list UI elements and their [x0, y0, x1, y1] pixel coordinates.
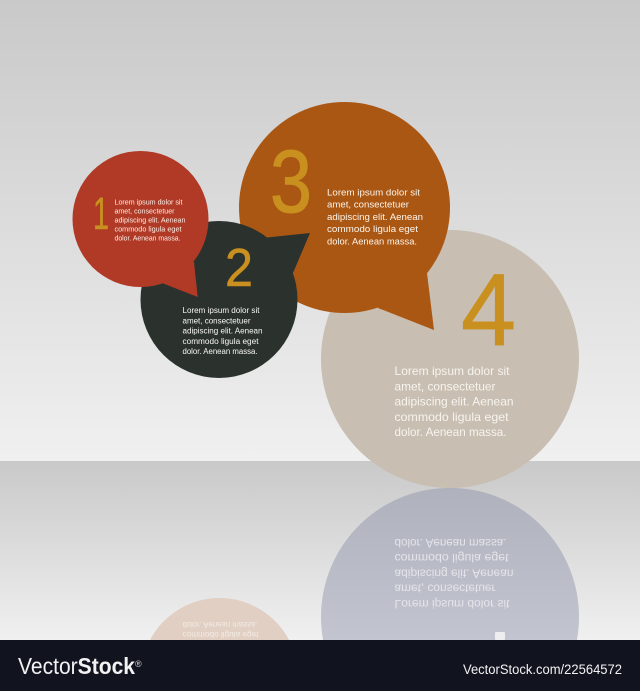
bubble 4 text: amet, consectetuer: [394, 379, 496, 393]
bubble 4 text: dolor. Aenean massa.: [394, 425, 506, 439]
bubble 4: [321, 230, 579, 488]
bubble 1 text: Lorem ipsum dolor sit: [114, 200, 183, 206]
reflection of bubble 2: [150, 598, 289, 640]
footer logo: VectorStock: [18, 653, 135, 679]
reflection of bubble 4: amet, consectetuer: [394, 582, 496, 596]
reflection of bubble 4: [321, 488, 579, 640]
reflective floor: [0, 461, 640, 640]
footer bar: [0, 640, 640, 691]
bubble 1 text: amet, consectetuer: [114, 208, 175, 216]
bubble 2 text: [182, 306, 262, 356]
reflected digit stem: [495, 632, 505, 640]
reflection of bubble 4: commodo ligula eget: [394, 551, 509, 565]
bubble 2 text: amet, consectetuer: [182, 316, 251, 325]
bubble 1 text: commodo ligula eget: [114, 226, 182, 234]
bubble 2 text: commodo ligula eget: [182, 337, 259, 346]
bubble 3: [239, 102, 450, 330]
bubble 3 text: dolor. Aenean massa.: [327, 236, 417, 247]
floor reflections: [150, 488, 579, 640]
bubble 1 text: [114, 200, 186, 242]
reflection of bubble 2: commodo ligula eget: [182, 630, 259, 639]
bubble 4 text: Lorem ipsum dolor sit: [394, 364, 510, 378]
bubble 3 text: commodo ligula eget: [327, 224, 418, 235]
bubble 3 text: [327, 188, 423, 247]
footer URL: VectorStock.com/22564572: [463, 662, 622, 677]
number 1: 1: [93, 188, 109, 239]
background wall: [0, 0, 640, 461]
reflection of bubble 4: Lorem ipsum dolor sit: [394, 597, 510, 611]
bubble 2: [140, 221, 310, 378]
reflection of bubble 2: dolor. Aenean massa.: [182, 620, 258, 629]
number 2: 2: [225, 238, 253, 298]
bubble 3 text: amet, consectetuer: [327, 200, 409, 211]
bubble 1 text: adipiscing elit. Aenean: [114, 218, 186, 224]
number 3: 3: [270, 131, 312, 231]
bubble 4 text: adipiscing elit. Aenean: [394, 395, 514, 409]
bubble 4 text: commodo ligula eget: [394, 410, 509, 424]
bubble 1: [72, 151, 208, 297]
bubble 3 text: Lorem ipsum dolor sit: [327, 188, 420, 198]
bubble 1 text: dolor. Aenean massa.: [114, 236, 181, 242]
bubble 4 text: [394, 364, 514, 439]
bubble 2 text: Lorem ipsum dolor sit: [182, 306, 260, 315]
reflection of bubble 4: adipiscing elit. Aenean: [394, 566, 514, 580]
registered mark: ®: [135, 659, 142, 669]
bubble 2 text: dolor. Aenean massa.: [182, 347, 258, 356]
number 4: 4: [461, 253, 516, 367]
reflection of bubble 4: dolor. Aenean massa.: [394, 536, 506, 550]
bubble 3 text: adipiscing elit. Aenean: [327, 212, 423, 223]
bubble 2 text: adipiscing elit. Aenean: [182, 327, 262, 336]
